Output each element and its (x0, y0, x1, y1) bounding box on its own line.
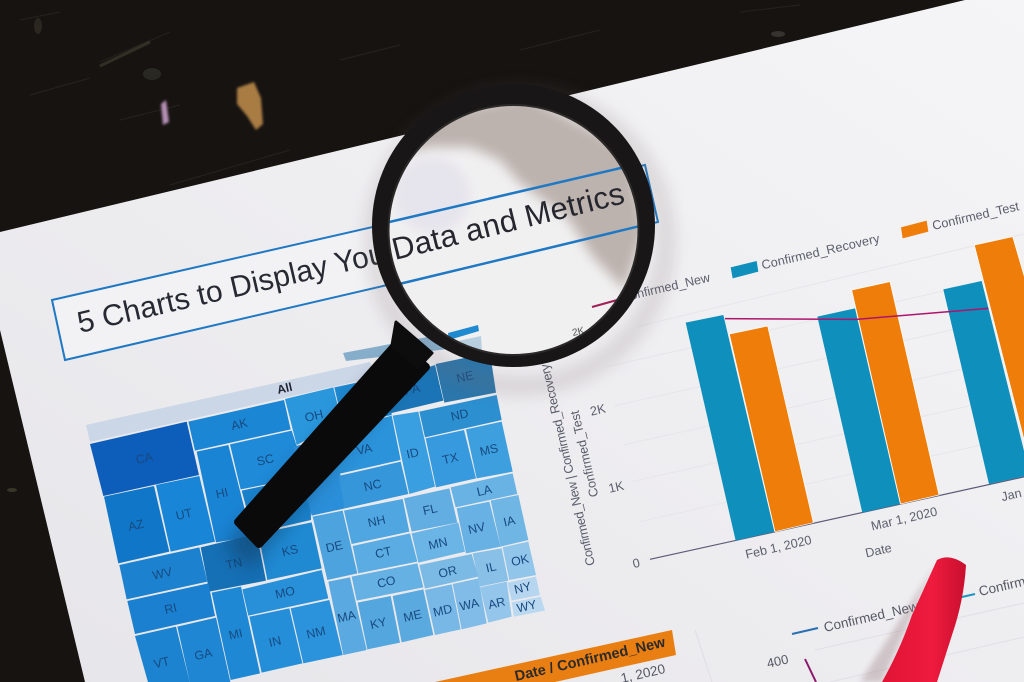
treemap state labels: NV (467, 519, 487, 537)
treemap state labels: TN (224, 555, 244, 572)
y axis ticks (589, 401, 641, 571)
legend series 1 (792, 628, 818, 634)
treemap state labels: NC (362, 476, 383, 494)
gridlines (607, 230, 1024, 522)
y tick: 400 (765, 651, 790, 671)
treemap state labels: WV (151, 564, 174, 583)
treemap state labels: HI (214, 485, 230, 502)
treemap state labels: MS (478, 441, 500, 459)
legend: Confirmed_New (620, 270, 712, 305)
treemap header: All (276, 380, 294, 397)
second chart: line chart (695, 570, 1024, 682)
treemap state labels: VA (355, 441, 374, 458)
magnified tick: 2K (571, 325, 586, 339)
treemap state labels: ID (405, 445, 420, 462)
treemap state labels: MI (227, 626, 244, 643)
series line (805, 659, 816, 682)
bars (686, 237, 1024, 541)
shadow of magnifier (225, 94, 666, 570)
magnified legend line (592, 300, 617, 307)
treemap state labels: SC (255, 451, 275, 469)
treemap state labels: WY (515, 597, 538, 615)
treemap state labels: OK (510, 551, 531, 569)
treemap state labels: UT (174, 506, 194, 523)
lens contents (390, 106, 638, 354)
treemap state labels: CA (134, 449, 155, 467)
treemap state labels: KY (369, 615, 388, 632)
treemap state labels: IL (484, 559, 498, 575)
treemap state labels: GA (193, 645, 214, 663)
lens rim (372, 84, 655, 367)
treemap state labels: AR (487, 595, 507, 612)
treemap state labels: OR (437, 563, 458, 581)
title box (52, 165, 658, 360)
treemap state labels: IA (502, 513, 517, 529)
treemap state labels: MO (274, 584, 296, 602)
treemap state labels: PA (403, 381, 422, 398)
y axis ticks: 2K (589, 401, 608, 419)
second chart: line chart: Confirmed_New (822, 598, 920, 635)
trend line (725, 308, 988, 319)
treemap state labels: ME (402, 607, 423, 625)
bar chart: confirmed cases by date (538, 199, 1024, 571)
treemap state labels: RI (163, 600, 178, 617)
legend series 2 (962, 594, 975, 597)
treemap state labels: MA (336, 608, 358, 626)
paint chip: pink (161, 100, 169, 125)
treemap state labels (127, 368, 538, 671)
lens rim highlight (388, 105, 638, 355)
legend: Confirmed_Recovery (760, 231, 882, 272)
paint chip: tan (237, 82, 263, 130)
x axis labels (744, 484, 1024, 562)
treemap state labels: KS (280, 542, 300, 559)
treemap state labels: ND (449, 406, 470, 424)
treemap state labels: DE (324, 538, 344, 555)
treemap state labels: NE (455, 368, 475, 386)
y axis title: Confirmed_Test (568, 409, 601, 498)
treemap state labels: AK (230, 415, 250, 433)
lens shading (414, 106, 638, 292)
treemap (86, 353, 545, 682)
treemap state labels: TX (441, 450, 460, 467)
x axis labels: Mar 1, 2020 (870, 505, 939, 533)
legend (592, 199, 1021, 307)
treemap state labels: IN (267, 633, 283, 650)
y axis ticks: 1K (607, 479, 626, 496)
treemap state labels: AZ (127, 517, 146, 534)
treemap state labels: NY (513, 579, 533, 597)
chart header bar behind the lens (343, 327, 482, 361)
y axis ticks: 0 (631, 556, 641, 571)
handle (238, 322, 432, 544)
treemap state labels: NM (305, 624, 327, 642)
treemap state labels: LA (475, 482, 494, 499)
treemap header (86, 362, 375, 442)
lens highlight (398, 160, 466, 230)
treemap state labels: VT (152, 654, 171, 671)
treemap state labels: CT (374, 544, 393, 561)
treemap state labels: FL (421, 501, 439, 518)
treemap state labels: OH (303, 407, 325, 425)
x axis labels: Feb 1, 2020 (744, 533, 813, 562)
treemap state labels: NH (366, 513, 387, 530)
treemap cells (90, 353, 545, 682)
legend: Confirmed_Test (931, 199, 1021, 233)
y axis title: Confirmed_New | Confirmed_Recovery (538, 362, 598, 567)
red marker pen (882, 557, 966, 682)
magnifier (238, 84, 655, 544)
treemap state labels: MN (427, 535, 449, 553)
title text: 5 Charts to Display Your (74, 235, 398, 340)
magnified title rules (385, 167, 640, 285)
treemap state labels: MD (432, 602, 454, 620)
table header: Date / Confirmed_New (435, 630, 676, 682)
magnified title text: Data and Metrics (388, 176, 628, 267)
treemap state labels: CO (376, 573, 397, 591)
x axis line (650, 473, 1024, 559)
magnified chart header (448, 325, 479, 338)
treemap state labels: WA (458, 595, 481, 614)
x axis labels: Date (864, 541, 893, 560)
shadow of marker (860, 565, 935, 682)
